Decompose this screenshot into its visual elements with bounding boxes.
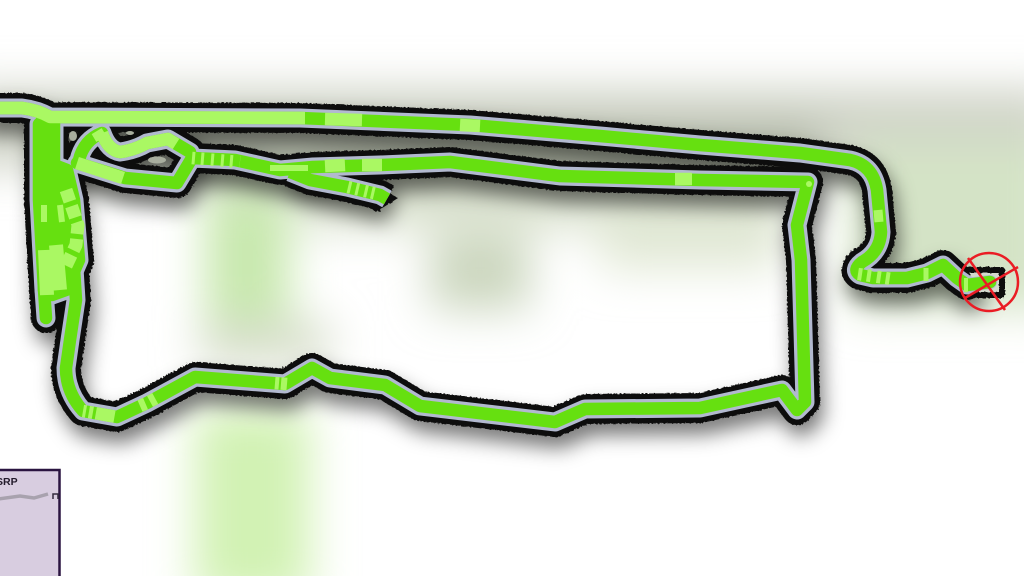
route shadow <box>0 120 971 434</box>
icon: end marker crossed circle <box>960 253 1018 311</box>
route outline <box>0 108 1002 422</box>
inset mini route <box>0 494 48 499</box>
light green route segments <box>0 108 966 417</box>
inset panel <box>0 470 60 576</box>
route casing <box>0 108 990 422</box>
route green fill <box>0 108 990 422</box>
gaps inside route junction <box>69 131 166 164</box>
